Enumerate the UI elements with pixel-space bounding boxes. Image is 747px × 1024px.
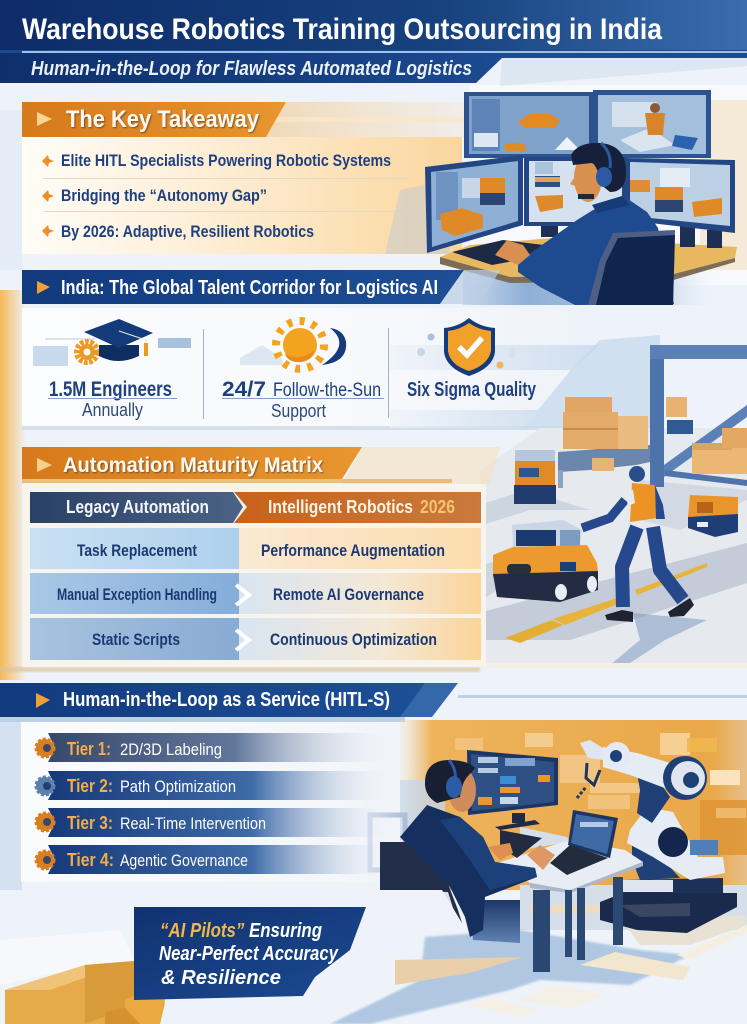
laptop: [550, 810, 618, 875]
stat: follow the sun: 24/7: [222, 378, 266, 401]
section band: India talent corridor: [22, 270, 500, 304]
icon: shield with check: [417, 318, 516, 376]
stat: engineers: Annually: [82, 400, 143, 420]
tablet: [500, 830, 542, 858]
stat: six sigma: Six Sigma Quality: [407, 379, 537, 401]
small robot left: [514, 450, 556, 504]
illustration: floor shadows: [330, 885, 747, 1024]
panel heading: The Key Takeaway: [66, 106, 260, 133]
tier 2: Path Optimization: [120, 777, 236, 796]
stat: follow the sun: [222, 321, 384, 421]
row 3: Continuous Optimization: [270, 630, 437, 649]
row 1: Performance Augmentation: [261, 541, 445, 560]
bullet 3: By 2026: Adaptive, Resilient Robotics: [61, 222, 314, 241]
header: legacy automation: Legacy Automation: [66, 497, 209, 517]
icon: graduation cap and gear: [33, 319, 191, 366]
header: legacy automation: [30, 492, 243, 523]
illustration: operator at workstation: [370, 750, 643, 972]
seat ledge: [370, 890, 460, 937]
tier 3: Tier 3:: [67, 813, 113, 833]
tier 3: Real-Time Intervention: [120, 814, 266, 833]
header: intelligent robotics: Intelligent Robotics: [268, 497, 413, 517]
stacked boxes: [563, 397, 747, 474]
illustration: warm warehouse backdrop: [370, 720, 747, 890]
panel: maturity table: [22, 484, 486, 667]
illustration: cardboard boxes: [0, 930, 165, 1024]
row 3: Static Scripts: [92, 630, 180, 649]
tier 4: [36, 845, 388, 874]
tier 2: Tier 2:: [67, 776, 113, 796]
warehouse racking: [558, 345, 747, 488]
stat: engineers: [33, 319, 191, 420]
callout: AI pilots: & Resilience: [161, 967, 281, 989]
small robot right: [688, 495, 738, 537]
panel: service tiers: [21, 722, 416, 882]
tier 3: [36, 808, 388, 837]
desk: [440, 237, 737, 277]
stat: engineers: 1.5M Engineers: [49, 378, 172, 401]
section heading: automation maturity matrix: [22, 447, 500, 484]
tier 1: Tier 1:: [67, 739, 111, 759]
row 1: [30, 528, 481, 569]
panel: india stats: [22, 308, 660, 430]
AMR cart robot: [493, 520, 598, 602]
illustration: warehouse floor with robots: [480, 345, 747, 668]
section band: human-in-the-loop: Human-in-the-Loop as a Service (HITL-S): [63, 689, 390, 711]
operator: [495, 143, 674, 305]
monitor: [467, 750, 558, 830]
stat: follow the sun: Support: [271, 401, 326, 421]
icon: sun and moon: [240, 321, 346, 369]
humanoid worker: [582, 466, 694, 622]
keyboard: [452, 240, 560, 265]
callout: AI pilots: Near-Perfect Accuracy: [159, 943, 339, 965]
bullet 2: Bridging the “Autonomy Gap”: [61, 186, 267, 205]
stat: six sigma: [407, 318, 537, 401]
illustration: robot arm: [577, 740, 737, 933]
subtitle: Human-in-the-Loop for Flawless Automated Logistics: [31, 58, 472, 80]
header band: [0, 0, 747, 86]
section band: human-in-the-loop: [0, 683, 747, 722]
section heading: automation maturity matrix: Automation Maturity Matrix: [63, 454, 323, 477]
panel: the key takeaway: [22, 102, 467, 254]
bullet 1: Elite HITL Specialists Powering Robotic Systems: [61, 151, 391, 170]
tier 4: Agentic Governance: [120, 851, 248, 870]
row 3: [30, 618, 481, 660]
section band: India talent corridor: India: The Global Talent Corridor for Logistics AI: [61, 277, 438, 299]
header: intelligent robotics: 2026: [420, 497, 455, 517]
chair: [588, 230, 675, 305]
callout: AI pilots: “AI Pilots” Ensuring: [160, 920, 322, 942]
stat: follow the sun: Follow-the-Sun: [273, 380, 381, 401]
tier 2: [36, 771, 388, 800]
header: intelligent robotics: [234, 492, 481, 523]
operator: [400, 760, 555, 943]
lower monitors: [425, 155, 735, 253]
tier 1: [36, 733, 388, 762]
title: Warehouse Robotics Training Outsourcing in India: [22, 13, 662, 46]
row 2: [30, 573, 481, 614]
chair: [380, 842, 462, 923]
desk: [520, 827, 570, 850]
row 2: Remote AI Governance: [273, 585, 424, 604]
top monitors: [464, 90, 711, 158]
callout: AI pilots: [134, 907, 366, 1000]
row 1: Task Replacement: [77, 541, 197, 560]
illustration: operator at monitors: [385, 90, 747, 305]
tier 4: Tier 4:: [67, 850, 114, 870]
row 2: Manual Exception Handling: [57, 586, 217, 604]
tier 1: 2D/3D Labeling: [120, 740, 222, 759]
